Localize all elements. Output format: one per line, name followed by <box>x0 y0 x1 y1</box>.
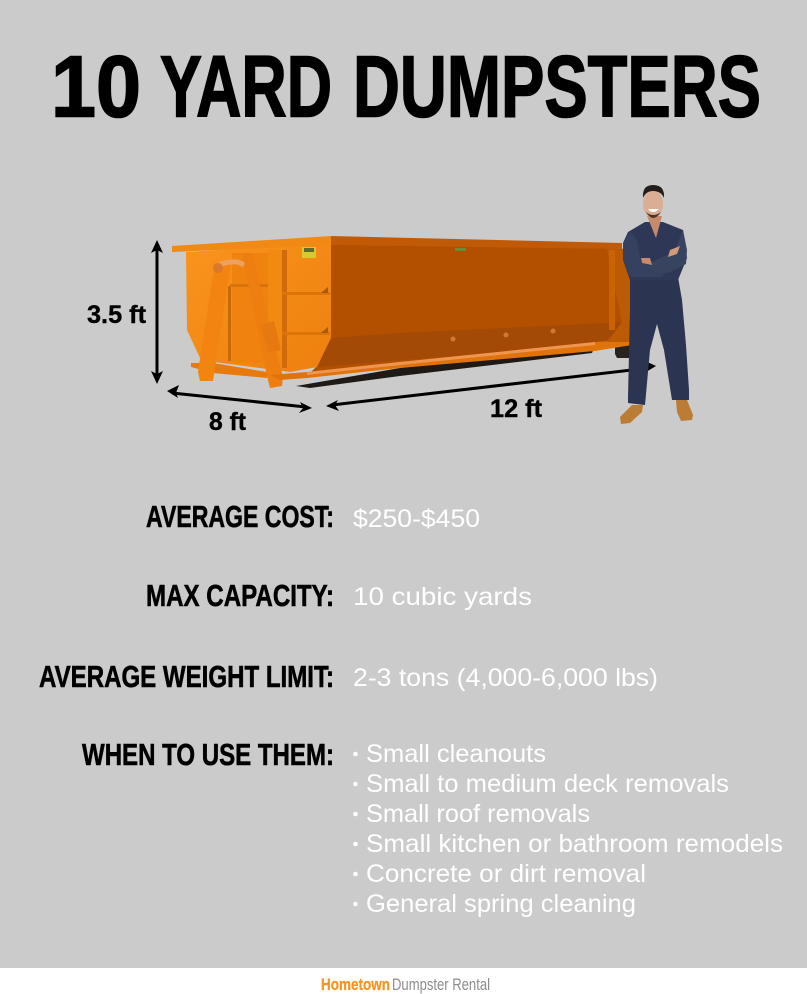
far post <box>607 249 631 342</box>
beard <box>646 212 661 218</box>
hand right <box>668 246 680 257</box>
near sleeve <box>623 232 665 277</box>
item 2: Small to medium deck removals <box>366 770 729 798</box>
value: average weight limit: 2-3 tons (4,000-6,000 lbs) <box>353 664 658 692</box>
item 3: Small roof removals <box>366 800 590 828</box>
title <box>51 38 761 136</box>
far sleeve <box>651 230 687 273</box>
bolts <box>450 336 456 342</box>
warning label <box>302 247 316 258</box>
worker figure <box>620 185 693 424</box>
boots <box>620 405 643 424</box>
dumpster lower slanted side <box>317 322 627 367</box>
green tag <box>455 248 466 251</box>
dumpster shadow <box>296 345 595 388</box>
neck and chest <box>647 216 662 238</box>
dumpster illustration <box>172 236 632 388</box>
torso <box>623 222 687 280</box>
left lift arm <box>198 263 231 381</box>
bullet 1 <box>353 752 358 756</box>
base rail <box>270 340 632 380</box>
dimension label: 3.5 ft: 3.5 ft <box>87 301 147 329</box>
hair <box>643 185 664 198</box>
right post and ladder <box>268 250 282 368</box>
dimension label: 8 ft: 8 ft <box>209 408 247 436</box>
item 6: General spring cleaning <box>366 890 636 918</box>
value: max capacity: 10 cubic yards <box>353 583 532 611</box>
title: YARD <box>160 38 332 136</box>
dimension arrow: width <box>167 385 312 413</box>
dimension arrow: height <box>151 240 163 384</box>
label: when to use them: WHEN TO USE THEM: <box>82 737 334 772</box>
bullet 4 <box>353 842 358 846</box>
footer logo <box>321 975 490 994</box>
logo words: Dumpster Rental: Dumpster Rental <box>392 975 490 994</box>
dumpster long side <box>307 243 631 376</box>
item 5: Concrete or dirt removal <box>366 860 646 888</box>
head <box>643 190 663 218</box>
base bar <box>191 363 267 378</box>
logo word: Hometown: Hometown <box>321 975 390 994</box>
bullet 5 <box>353 872 358 876</box>
bullet 6 <box>353 902 358 906</box>
lift plate <box>261 321 281 353</box>
bullet 3 <box>353 812 358 816</box>
dimension arrow: length <box>326 361 656 411</box>
list: when to use them <box>353 740 783 918</box>
value: average cost: $250-$450 <box>353 505 480 533</box>
rim <box>172 236 331 252</box>
label: average weight limit: AVERAGE WEIGHT LIMIT: <box>39 659 334 694</box>
label: max capacity: MAX CAPACITY: <box>146 578 334 613</box>
bullet 2 <box>353 782 358 786</box>
end panel shading <box>232 253 268 363</box>
hand left <box>641 258 652 265</box>
hook <box>216 262 244 268</box>
title: 10 <box>51 38 141 136</box>
legs <box>628 277 689 405</box>
smile <box>648 209 659 212</box>
dimension label: 12 ft: 12 ft <box>490 395 543 423</box>
footer band <box>0 968 807 994</box>
label: average cost: AVERAGE COST: <box>146 499 334 534</box>
item 1: Small cleanouts <box>366 740 546 768</box>
dumpster end face <box>186 243 331 372</box>
item 4: Small kitchen or bathroom remodels <box>366 830 783 858</box>
right lift arm <box>242 253 283 388</box>
